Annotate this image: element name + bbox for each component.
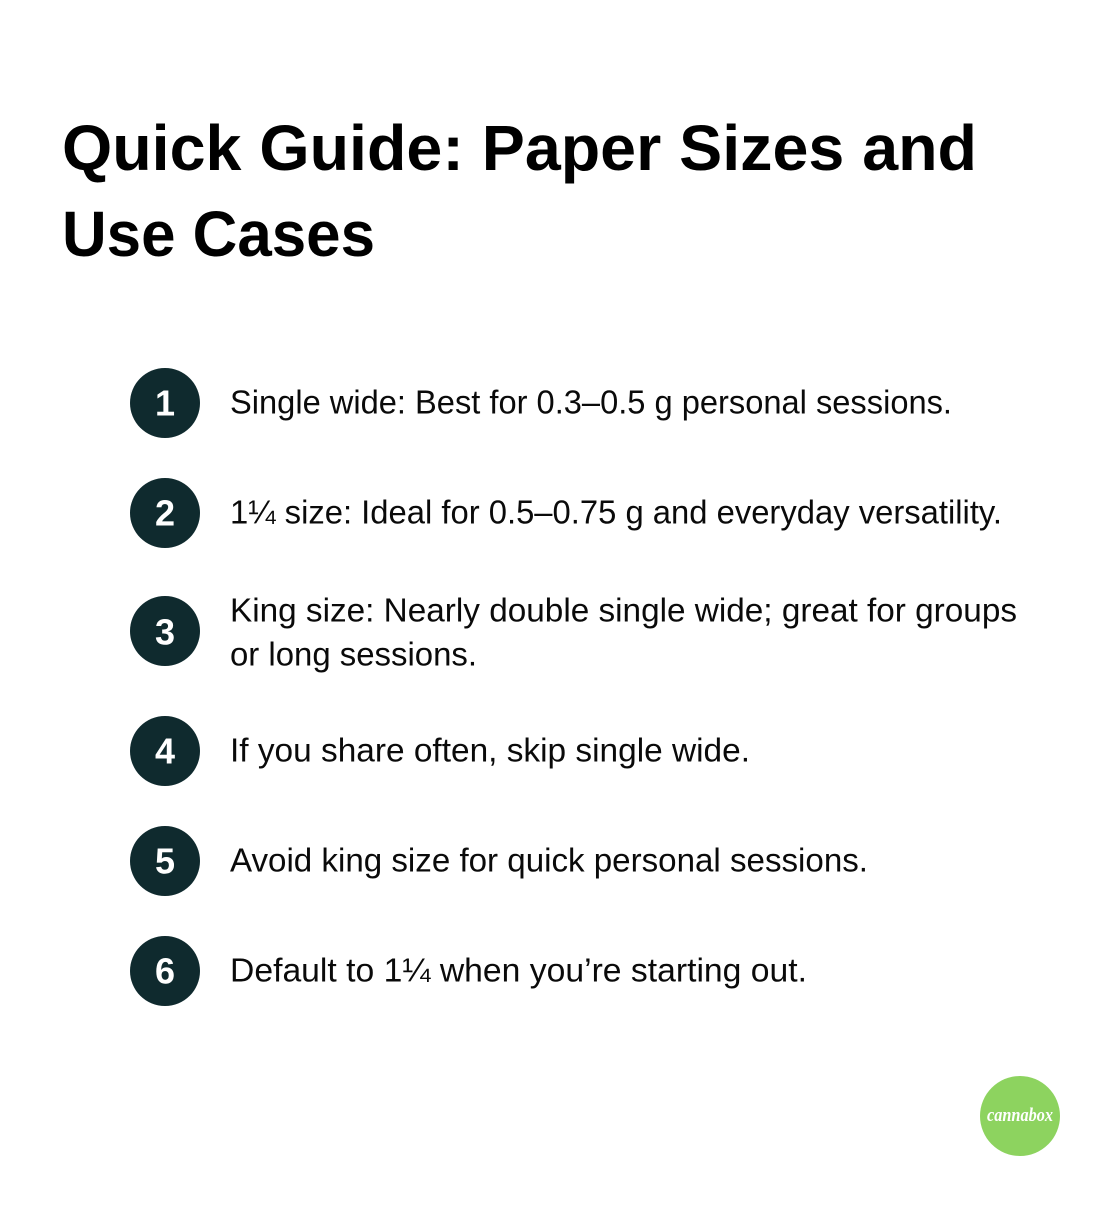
item 4: If you share often, skip single wide. — [230, 732, 750, 769]
item 2: 2 — [155, 492, 175, 534]
item 6 — [130, 936, 807, 1006]
title: Use Cases — [62, 198, 375, 270]
item 4 — [130, 716, 750, 786]
item 5: 5 — [155, 840, 175, 882]
item 1: Single wide: Best for 0.3–0.5 g personal sessions. — [230, 384, 952, 420]
item 2 — [130, 478, 1002, 548]
list of tips — [130, 368, 1017, 1006]
item 3: 3 — [155, 612, 175, 652]
item 3: King size: Nearly double single wide; great for groups — [230, 592, 1017, 629]
item 4: 4 — [155, 730, 175, 772]
title: Quick Guide: Paper Sizes and — [62, 112, 977, 184]
title — [62, 112, 977, 270]
item 1 — [130, 368, 952, 438]
item 1: 1 — [155, 382, 175, 424]
item 6: 6 — [155, 950, 175, 992]
logo: cannabox badge — [980, 1076, 1060, 1156]
item 5: Avoid king size for quick personal sessions. — [230, 842, 868, 879]
item 3 — [130, 592, 1017, 673]
item 5 — [130, 826, 868, 896]
item 2: 1¼ size: Ideal for 0.5–0.75 g and everyday versatility. — [230, 494, 1002, 530]
item 6: Default to 1¼ when you’re starting out. — [230, 952, 807, 989]
item 3: or long sessions. — [230, 636, 477, 673]
logo: cannabox badge: cannabox — [987, 1105, 1053, 1126]
